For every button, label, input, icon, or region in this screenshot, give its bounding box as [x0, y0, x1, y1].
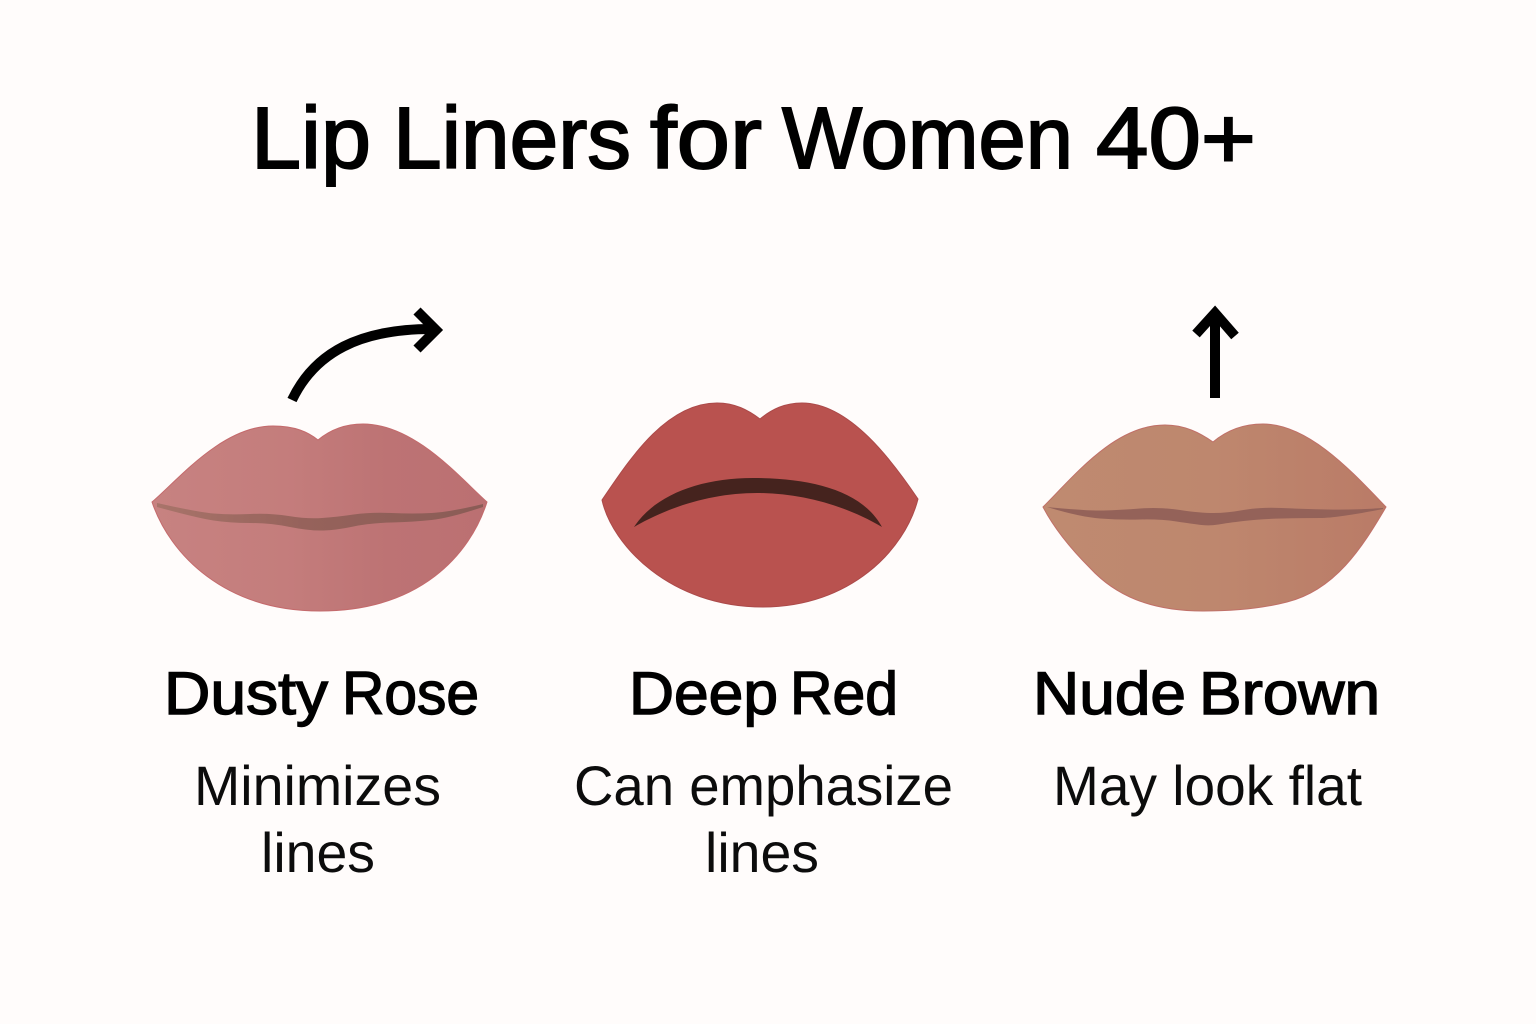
text: Can emphasize lines [574, 754, 953, 884]
text: Minimizes lines: Minimizes [194, 754, 441, 817]
icon: deep red lips [602, 403, 918, 607]
panel: Dusty Rose [152, 311, 487, 884]
panel: Nude Brown [1033, 313, 1386, 817]
heading: Dusty Rose: Rose [342, 660, 479, 727]
text: Minimizes lines [194, 754, 441, 884]
title: Liners [393, 90, 631, 187]
title: for [650, 90, 762, 187]
heading: Deep Red [629, 660, 898, 727]
heading: Nude Brown: Brown [1199, 660, 1380, 727]
panel: Deep Red [574, 403, 953, 884]
heading: Deep Red: Red [790, 660, 898, 727]
icon: curved arrow [292, 311, 436, 400]
title: Lip [251, 90, 371, 187]
text: May look flat: May look flat [1053, 754, 1362, 817]
heading: Nude Brown [1033, 660, 1380, 727]
heading: Dusty Rose [164, 660, 479, 727]
title: 40+ [1096, 90, 1256, 187]
heading: Deep Red: Deep [629, 660, 778, 727]
heading: Nude Brown: Nude [1033, 660, 1186, 727]
icon: nude brown lips [1043, 424, 1386, 611]
text: Can emphasize lines: lines [705, 821, 819, 884]
text: Can emphasize lines: Can emphasize [574, 754, 953, 817]
heading: Dusty Rose: Dusty [164, 660, 328, 727]
title: Women [782, 90, 1073, 187]
icon: dusty rose lips [152, 424, 487, 611]
title [251, 90, 1256, 187]
icon: up arrow [1196, 313, 1235, 398]
text: Minimizes lines: lines [261, 821, 375, 884]
